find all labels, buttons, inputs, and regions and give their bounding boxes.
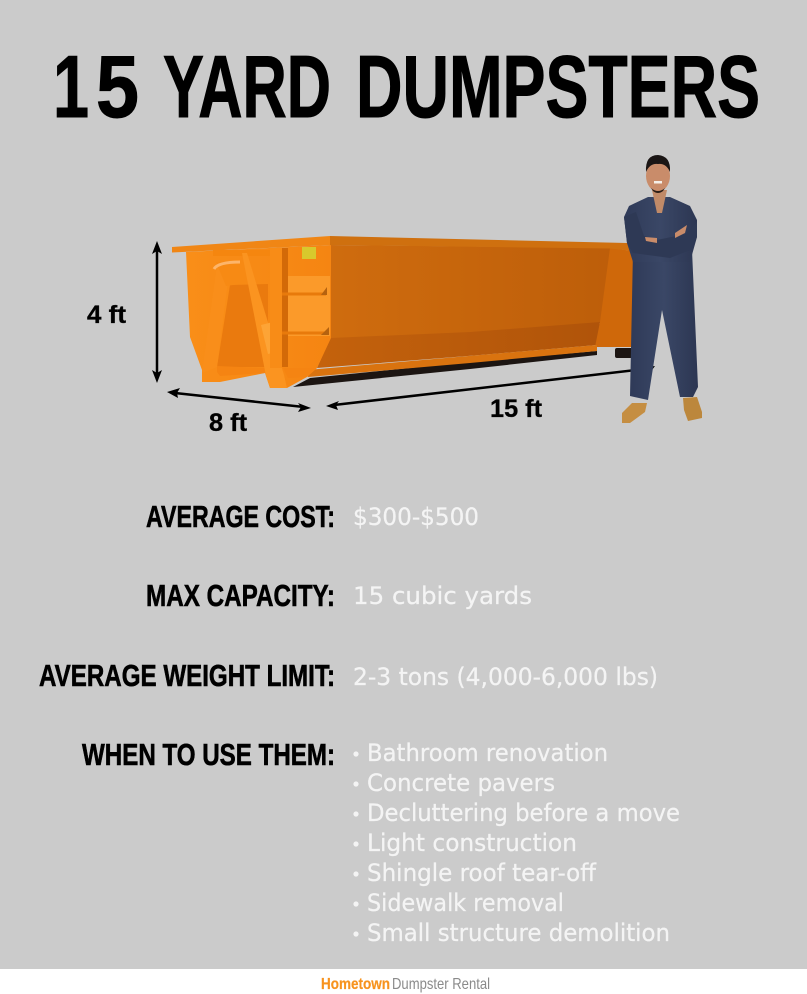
person boot right (683, 397, 702, 421)
dumpster long side (330, 245, 612, 340)
person (622, 155, 702, 423)
label: average cost: AVERAGE COST: (146, 500, 335, 534)
label: max capacity: MAX CAPACITY: (146, 579, 335, 613)
dumpster dark strip (282, 248, 288, 367)
label: average weight limit: AVERAGE WEIGHT LIMIT: (39, 659, 335, 693)
rung gussets (321, 287, 329, 335)
dumpster end panel (186, 245, 331, 388)
title digit: 1: 1 (53, 37, 89, 136)
dumpster right end post (595, 248, 633, 347)
dumpster top rim right (330, 236, 633, 251)
dumpster bottom rail (307, 345, 597, 377)
list: when to use them (353, 739, 680, 947)
person legs (630, 250, 698, 400)
value: max capacity: 15 cubic yards (353, 582, 532, 610)
arrow: height (152, 241, 162, 383)
hook frame top (213, 250, 281, 256)
dumpster top rim left (172, 236, 330, 252)
person boot left (622, 403, 647, 423)
dumpster end shading (217, 284, 268, 367)
dumpster lower slope (317, 322, 600, 368)
warning label (302, 247, 316, 259)
person beard (651, 188, 665, 193)
hook frame left leg (202, 265, 230, 373)
hook frame crossbar (216, 260, 247, 286)
person head (646, 160, 670, 192)
person torso (624, 197, 697, 262)
dumpster shadow (293, 351, 597, 387)
person neck (652, 190, 667, 213)
person teeth (654, 181, 662, 184)
dimension label: 15 ft: 15 ft (490, 395, 543, 423)
dimension label: 8 ft: 8 ft (209, 409, 248, 437)
list item: Decluttering before a move (367, 799, 680, 827)
list item: Sidewalk removal (367, 889, 564, 917)
list item: Concrete pavers (367, 769, 555, 797)
panel rungs (282, 294, 326, 333)
value: average cost: $300-$500 (353, 503, 479, 531)
person hands (645, 225, 687, 243)
list item: Bathroom renovation (367, 739, 608, 767)
hook frame base (217, 366, 265, 376)
list item: Small structure demolition (367, 919, 670, 947)
dumpster illustration (172, 236, 655, 388)
dumpster rear tail (633, 346, 655, 349)
list item: Light construction (367, 829, 577, 857)
hook ring (214, 262, 240, 269)
logo: dumpster rental: Dumpster Rental (392, 976, 490, 993)
arrow: length (326, 366, 655, 410)
label: when to use them: WHEN TO USE THEM: (82, 738, 335, 772)
footer band (0, 969, 807, 994)
frame post (270, 248, 282, 368)
hook frame right leg (242, 253, 287, 388)
dumpster rear skid (615, 348, 635, 358)
dimension label: 4 ft: 4 ft (87, 301, 127, 329)
title (53, 37, 760, 136)
person hair (646, 155, 670, 172)
logo: hometown: Hometown (321, 976, 390, 993)
title digit: 5: 5 (96, 37, 139, 136)
hook plate (261, 322, 280, 354)
footer logo (321, 976, 490, 993)
list item: Shingle roof tear-off (367, 859, 596, 887)
arrow: width (167, 388, 311, 412)
title word: yard: YARD (163, 37, 331, 136)
person crossed arm (624, 212, 697, 258)
value: average weight limit: 2-3 tons (4,000-6,000 lbs) (353, 663, 658, 691)
dumpster panel highlight (288, 276, 330, 336)
